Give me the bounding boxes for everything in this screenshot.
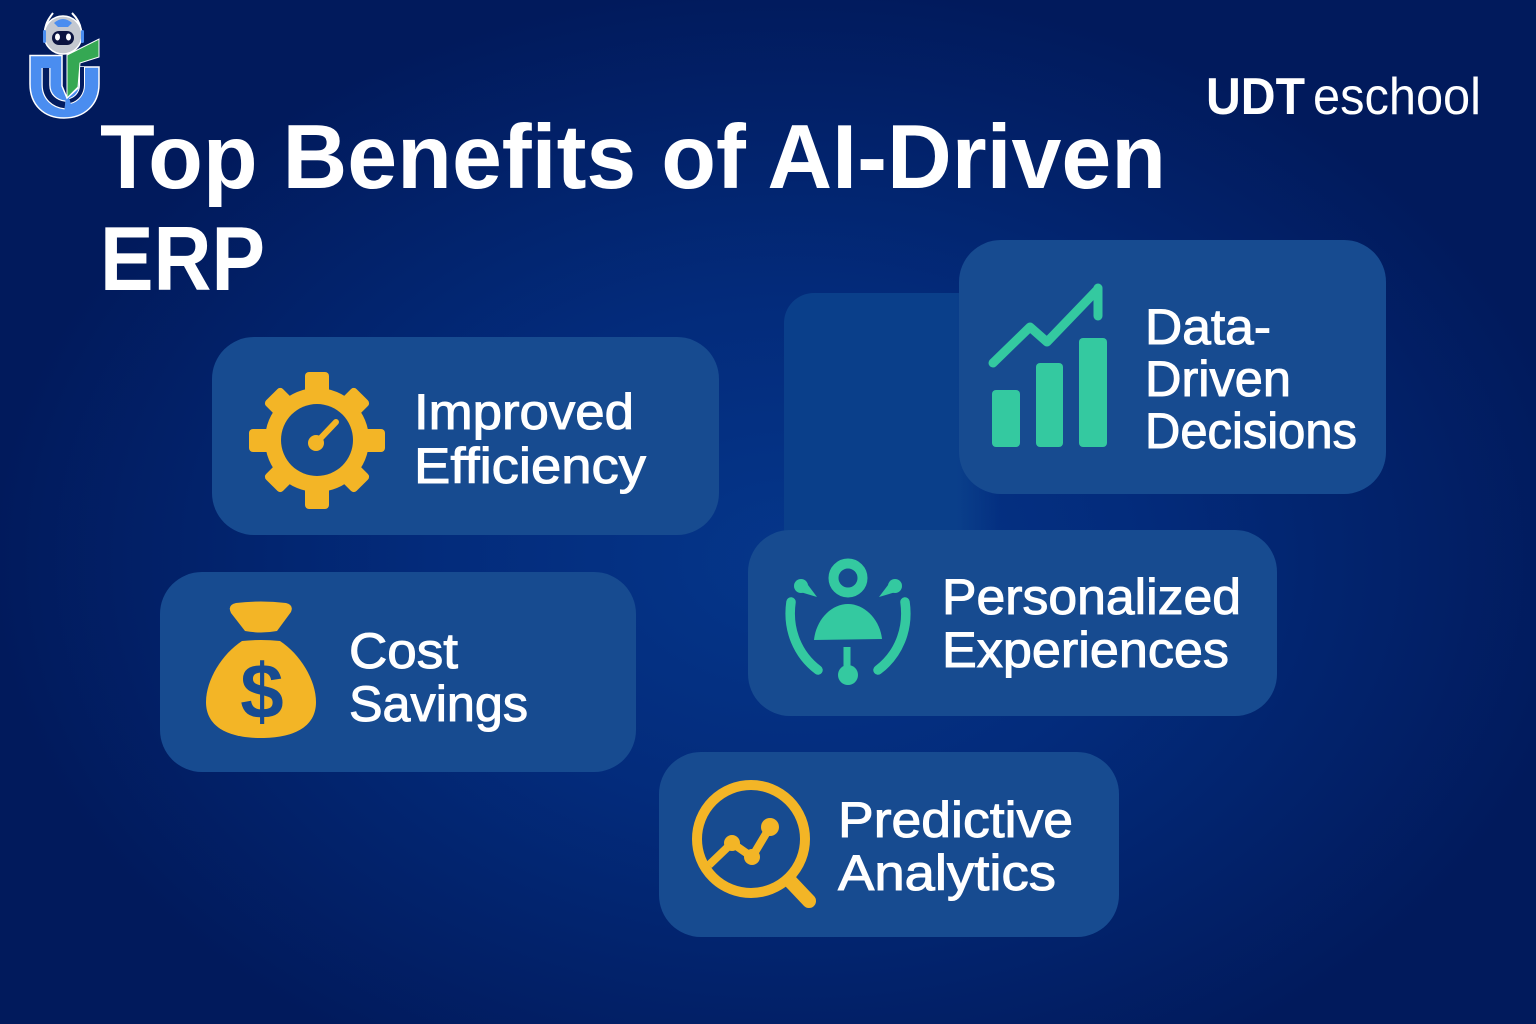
panel: improved efficiency <box>212 337 719 535</box>
panel: personalized experiences <box>748 530 1277 716</box>
dollar sign: $ <box>240 647 284 735</box>
title <box>100 107 1166 310</box>
label: Data- <box>1145 299 1271 355</box>
panel: data-driven decisions: Decisions <box>1145 403 1357 459</box>
faint back panel <box>784 293 1084 593</box>
panel: cost savings <box>160 572 636 772</box>
panel: predictive analytics: Analytics <box>838 845 1056 901</box>
brand wordmark <box>1206 68 1481 126</box>
panel: cost savings: Savings <box>349 676 528 732</box>
logo T <box>67 39 99 98</box>
logo U <box>30 56 99 118</box>
panel: predictive analytics <box>659 752 1119 937</box>
label: Personalized <box>942 569 1241 625</box>
label: Predictive <box>838 792 1073 848</box>
icon: person with arcs <box>790 564 906 685</box>
icon: money bag <box>206 602 316 738</box>
panel: data-driven decisions: Driven <box>1145 351 1291 407</box>
label: Cost <box>349 623 458 679</box>
title: Top Benefits of AI-Driven <box>100 107 1166 208</box>
panel: data-driven decisions <box>959 240 1386 494</box>
brand wordmark: eschool <box>1313 68 1481 126</box>
label: Improved <box>414 384 634 440</box>
logo: robot and UT mark <box>30 13 99 118</box>
icon: bar chart with trend line <box>992 288 1107 447</box>
icon: gear gauge <box>249 372 385 509</box>
title: ERP <box>100 209 265 310</box>
icon: magnifier with line chart <box>697 785 809 901</box>
panel: personalized experiences: Experiences <box>942 622 1229 678</box>
panel: improved efficiency: Efficiency <box>414 438 646 494</box>
logo robot <box>43 13 84 54</box>
brand wordmark: UDT <box>1206 68 1305 126</box>
